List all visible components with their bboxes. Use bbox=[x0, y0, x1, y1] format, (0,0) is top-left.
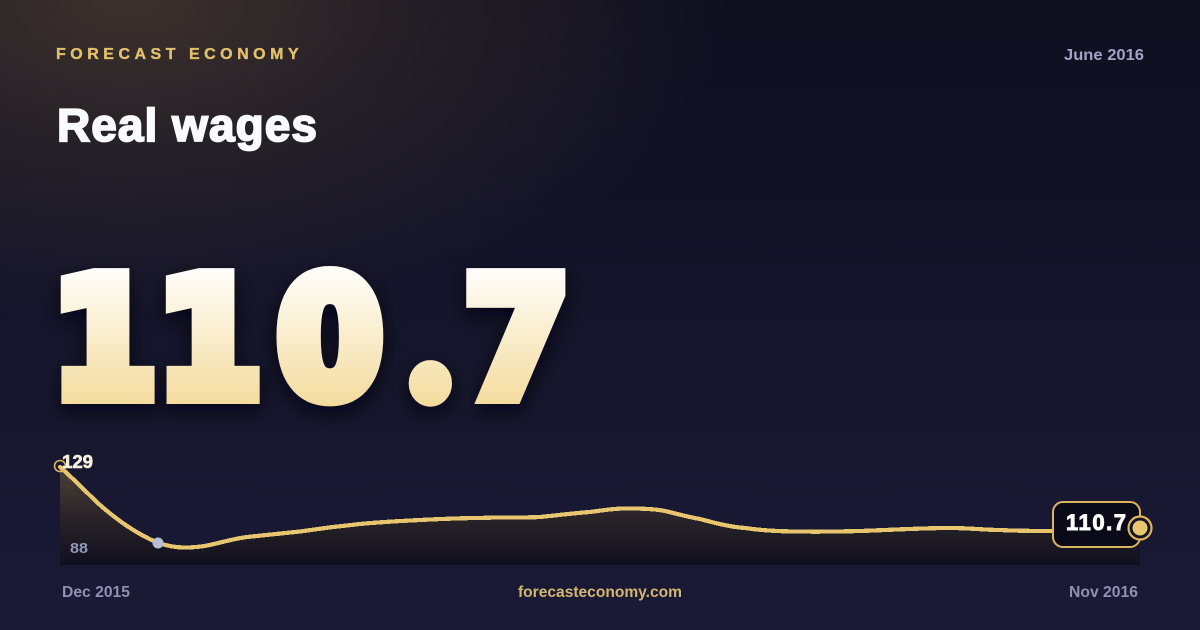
title: Real wages bbox=[57, 99, 317, 151]
min label: 88 bbox=[70, 540, 88, 557]
min marker bbox=[152, 538, 164, 548]
headline value: 1 bbox=[157, 245, 262, 435]
end marker bbox=[1128, 516, 1152, 540]
headline value bbox=[52, 234, 570, 436]
sparkline chart bbox=[54, 452, 1152, 565]
eyebrow: source name: FORECAST ECONOMY bbox=[56, 46, 303, 63]
area under line bbox=[60, 467, 1140, 565]
date label: June 2016 bbox=[1064, 47, 1144, 64]
end date label: Nov 2016 bbox=[1069, 584, 1138, 601]
start marker bbox=[54, 460, 66, 472]
start date label: Dec 2015 bbox=[62, 584, 130, 601]
headline value: 1 bbox=[52, 245, 157, 435]
headline value: 0 bbox=[277, 245, 383, 435]
current value tag bbox=[1053, 502, 1140, 547]
headline value: 7 bbox=[464, 245, 570, 435]
website: forecasteconomy.com bbox=[518, 584, 682, 601]
max label: 129 bbox=[62, 452, 93, 472]
headline value: . bbox=[409, 234, 452, 436]
trend line bbox=[60, 467, 1140, 548]
current value tag: 110.7 bbox=[1066, 510, 1126, 535]
